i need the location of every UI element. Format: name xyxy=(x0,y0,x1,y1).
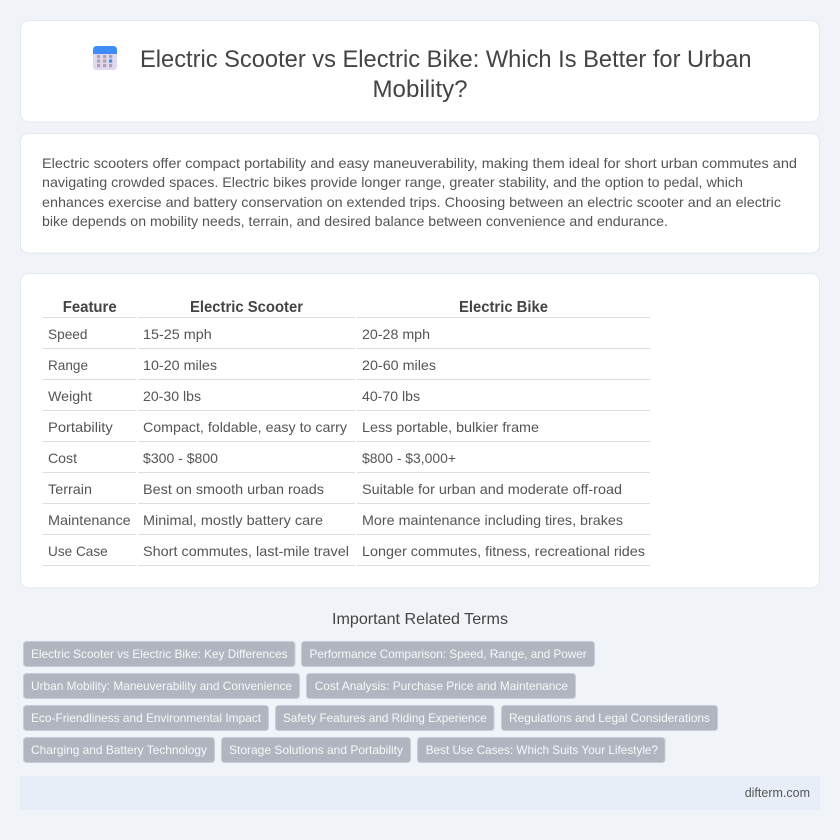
table row: weight: 20-30 lbs xyxy=(143,388,201,404)
footer xyxy=(20,776,820,810)
table row: terrain: Terrain xyxy=(48,481,92,497)
table row: cost: Cost xyxy=(48,450,77,466)
title xyxy=(140,46,752,103)
table row: use case: Use Case xyxy=(48,543,108,559)
tag: best use cases xyxy=(418,738,665,762)
table row: range: Range xyxy=(48,357,88,373)
table row: speed: 20-28 mph xyxy=(362,326,430,342)
table row: portability: Compact, foldable, easy to carry xyxy=(143,419,347,435)
table row: maintenance: Minimal, mostly battery care xyxy=(143,512,323,528)
tag: best use cases: Best Use Cases: Which Suits Your Lifestyle? xyxy=(426,743,658,757)
text block: introduction: enhances exercise and battery conservation on extended trips. Choosing between an electric scooter and an electric xyxy=(42,194,781,210)
table row: use case: Longer commutes, fitness, recreational rides xyxy=(362,543,645,559)
table row: range: 20-60 miles xyxy=(362,357,436,373)
table row: terrain: Suitable for urban and moderate off-road xyxy=(362,481,622,497)
tag: regulations: Regulations and Legal Considerations xyxy=(509,711,710,725)
tag: safety features xyxy=(276,706,494,730)
tag: storage: Storage Solutions and Portability xyxy=(229,743,403,757)
table row: maintenance: Maintenance xyxy=(48,512,131,528)
text block: introduction xyxy=(42,155,797,229)
table row: use case xyxy=(43,543,650,566)
footer brand text: difterm.com xyxy=(745,785,810,800)
table row: weight: 40-70 lbs xyxy=(362,388,420,404)
tag: charging xyxy=(24,738,214,762)
tag: key differences xyxy=(24,642,295,666)
text block: introduction: navigating crowded spaces. Electric bikes provide longer range, greater stability, and the option to pedal, which xyxy=(42,174,743,190)
tag: cost analysis: Cost Analysis: Purchase Price and Maintenance xyxy=(315,679,568,693)
title: Electric Scooter vs Electric Bike: Which Is Better for Urban xyxy=(140,46,752,73)
icon: calendar xyxy=(93,46,117,70)
text block: introduction: bike depends on mobility needs, terrain, and desired balance between convenience and endurance. xyxy=(42,213,668,229)
tag: urban mobility: Urban Mobility: Maneuverability and Convenience xyxy=(31,679,292,693)
table row: speed: Speed xyxy=(48,326,88,342)
table row: portability: Less portable, bulkier frame xyxy=(362,419,539,435)
title: Mobility? xyxy=(372,76,468,103)
table row: cost xyxy=(43,450,650,473)
panel: header xyxy=(20,20,820,122)
tag: regulations xyxy=(502,706,718,730)
tag: performance comparison: Performance Comparison: Speed, Range, and Power xyxy=(310,647,587,661)
table row: weight xyxy=(43,388,650,411)
table row: weight: Weight xyxy=(48,388,92,404)
table header row: Electric Bike xyxy=(459,299,548,316)
table row: use case: Short commutes, last-mile travel xyxy=(143,543,349,559)
tag: cost analysis xyxy=(306,674,576,698)
table row: speed xyxy=(43,326,650,349)
table header row: Electric Scooter xyxy=(190,299,303,316)
tag: key differences: Electric Scooter vs Electric Bike: Key Differences xyxy=(31,647,288,661)
tag: safety features: Safety Features and Riding Experience xyxy=(283,711,487,725)
heading: important related terms: Important Related Terms xyxy=(332,611,508,628)
table row: terrain: Best on smooth urban roads xyxy=(143,481,324,497)
panel: comparison table xyxy=(20,274,820,588)
related term tags xyxy=(24,642,718,762)
table row: cost: $300 - $800 xyxy=(143,450,218,466)
table row: portability xyxy=(43,419,650,442)
tag: storage xyxy=(222,738,410,762)
table row: maintenance xyxy=(43,512,650,535)
tag: eco-friendliness xyxy=(24,706,268,730)
table row: range: 10-20 miles xyxy=(143,357,217,373)
tag: eco-friendliness: Eco-Friendliness and Environmental Impact xyxy=(31,711,262,725)
table header row xyxy=(43,299,650,318)
table row: speed: 15-25 mph xyxy=(143,326,212,342)
tag: performance comparison xyxy=(302,642,594,666)
table header row: Feature xyxy=(63,299,117,316)
text block: introduction: Electric scooters offer compact portability and easy maneuverability, making them ideal for short urban commutes and xyxy=(42,155,797,171)
table row: portability: Portability xyxy=(48,419,113,435)
table row: maintenance: More maintenance including tires, brakes xyxy=(362,512,623,528)
table row: cost: $800 - $3,000+ xyxy=(362,450,456,466)
table row: range xyxy=(43,357,650,380)
tag: urban mobility xyxy=(24,674,300,698)
tag: charging: Charging and Battery Technology xyxy=(31,743,207,757)
panel: introduction paragraph xyxy=(20,134,820,253)
table row: terrain xyxy=(43,481,650,504)
